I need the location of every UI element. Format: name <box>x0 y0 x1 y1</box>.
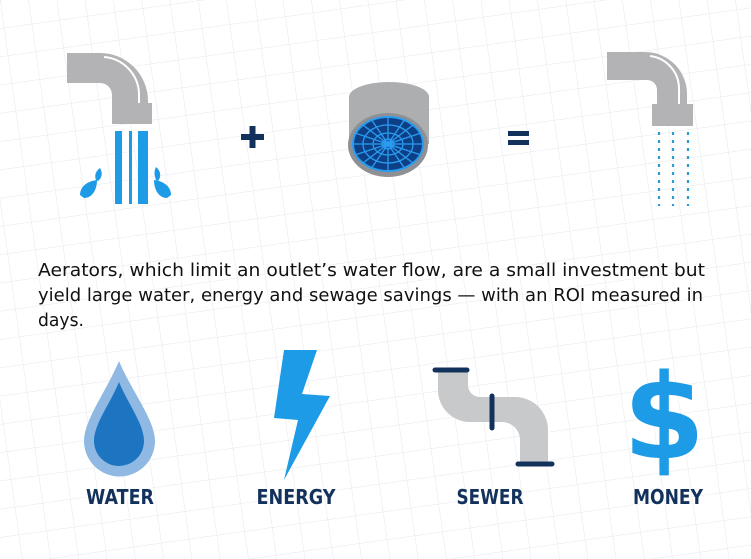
label: sewer: SEWER <box>456 485 524 509</box>
description text <box>38 260 705 331</box>
icon: faucet with aerated flow <box>607 52 693 206</box>
icon: water drop <box>84 361 155 476</box>
label: energy: ENERGY <box>256 485 336 509</box>
description text: Aerators, which limit an outlet’s water flow, are a small investment but <box>38 260 705 281</box>
plus sign <box>241 126 264 148</box>
description text: days. <box>38 310 84 331</box>
description text: yield large water, energy and sewage savings — with an ROI measured in <box>38 285 703 306</box>
labels <box>86 485 703 509</box>
equals sign <box>508 131 529 145</box>
icon: aerator <box>348 82 429 177</box>
icon: dollar sign: $ <box>623 348 705 486</box>
icon: lightning bolt <box>274 350 330 480</box>
label: money: MONEY <box>633 485 703 509</box>
label: water: WATER <box>86 485 154 509</box>
icon: faucet with full water flow <box>67 53 171 204</box>
icon: sewer pipe <box>435 370 552 464</box>
